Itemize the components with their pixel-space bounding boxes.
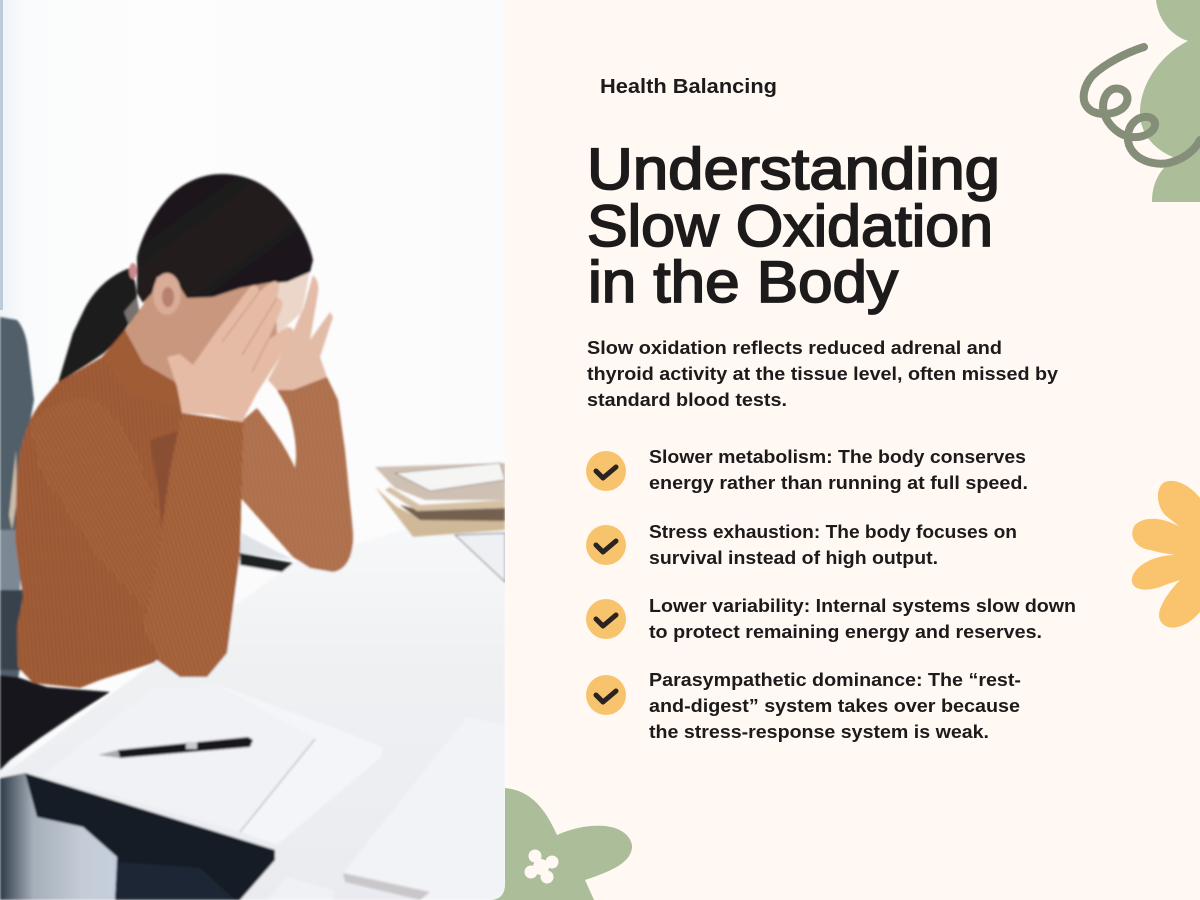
list item: lower variability: to protect remaining energy and reserves. [649,622,1042,642]
icon: check badge [586,675,626,715]
decoration: top-right green blobs [1140,0,1200,202]
photo: finger creases [222,292,277,372]
photo: ponytail [58,268,137,383]
list item: stress exhaustion: Stress exhaustion: The body focuses on [649,522,1017,542]
photo: forehead [275,270,310,335]
list item: slower metabolism [586,447,1028,493]
decoration: squiggle [1084,47,1200,164]
photo: neck and face [125,277,300,383]
list item: stress exhaustion [586,522,1017,568]
list item: stress exhaustion: survival instead of high output. [649,548,938,568]
photo: chair back [0,317,34,680]
photo: chair arm [0,675,110,770]
photo: folder [455,533,505,582]
photo: far hand [268,275,333,390]
photo: far arm sleeve [240,377,353,572]
photo: upper book [375,463,505,500]
photo: table surface [0,500,505,900]
eyebrow label: Health Balancing [600,76,777,98]
photo: hair [137,174,313,303]
photo: tablet reflection [25,773,275,900]
photo: right document [413,886,504,898]
intro paragraph: thyroid activity at the tissue level, often missed by [587,364,1058,384]
list item: parasympathetic dominance: the stress-response system is weak. [649,722,989,742]
photo: ear [153,273,181,315]
photo: near forearm sleeve [143,413,243,677]
list item: lower variability [586,596,1076,642]
photo: stressed woman at desk [0,0,505,900]
photo: scrunchie [129,263,137,279]
photo: pen [98,737,253,758]
photo: stray hair strands [9,450,17,530]
photo: paper sheets [244,802,305,843]
title: in the Body [588,250,898,315]
title: Understanding [587,137,1000,202]
list item: parasympathetic dominance: Parasympathetic dominance: The “rest- [649,670,1021,690]
photo: tablet [0,772,119,900]
intro paragraph: standard blood tests. [587,390,787,410]
title [587,137,1000,315]
title: Slow Oxidation [587,194,993,259]
photo: torso shadow gap [150,431,178,519]
photo: book dark band [400,505,505,521]
icon: check badge [586,451,626,491]
decoration: white flower [524,850,558,884]
photo: turtleneck collar [107,335,120,351]
photo: sweater body [15,330,243,688]
icon: check badge [586,525,626,565]
list item: parasympathetic dominance: and-digest” system takes over because [649,696,1020,716]
icon: check badge [586,599,626,639]
photo: bottom paper [267,877,333,900]
photo: upper arm [32,402,160,603]
list item: slower metabolism: Slower metabolism: The body conserves [649,447,1026,467]
photo: tablet on books [395,463,505,491]
photo: lower book [375,487,505,537]
intro paragraph [587,338,1058,410]
intro paragraph: Slow oxidation reflects reduced adrenal and [587,338,1002,358]
photo: armrest [240,553,293,572]
list item: parasympathetic dominance [586,670,1021,742]
decoration: yellow flower [1132,481,1200,628]
list item: lower variability: Lower variability: Internal systems slow down [649,596,1076,616]
decoration: green blob bottom [480,788,632,900]
list item: slower metabolism: energy rather than running at full speed. [649,473,1028,493]
photo: near hand [167,281,293,422]
